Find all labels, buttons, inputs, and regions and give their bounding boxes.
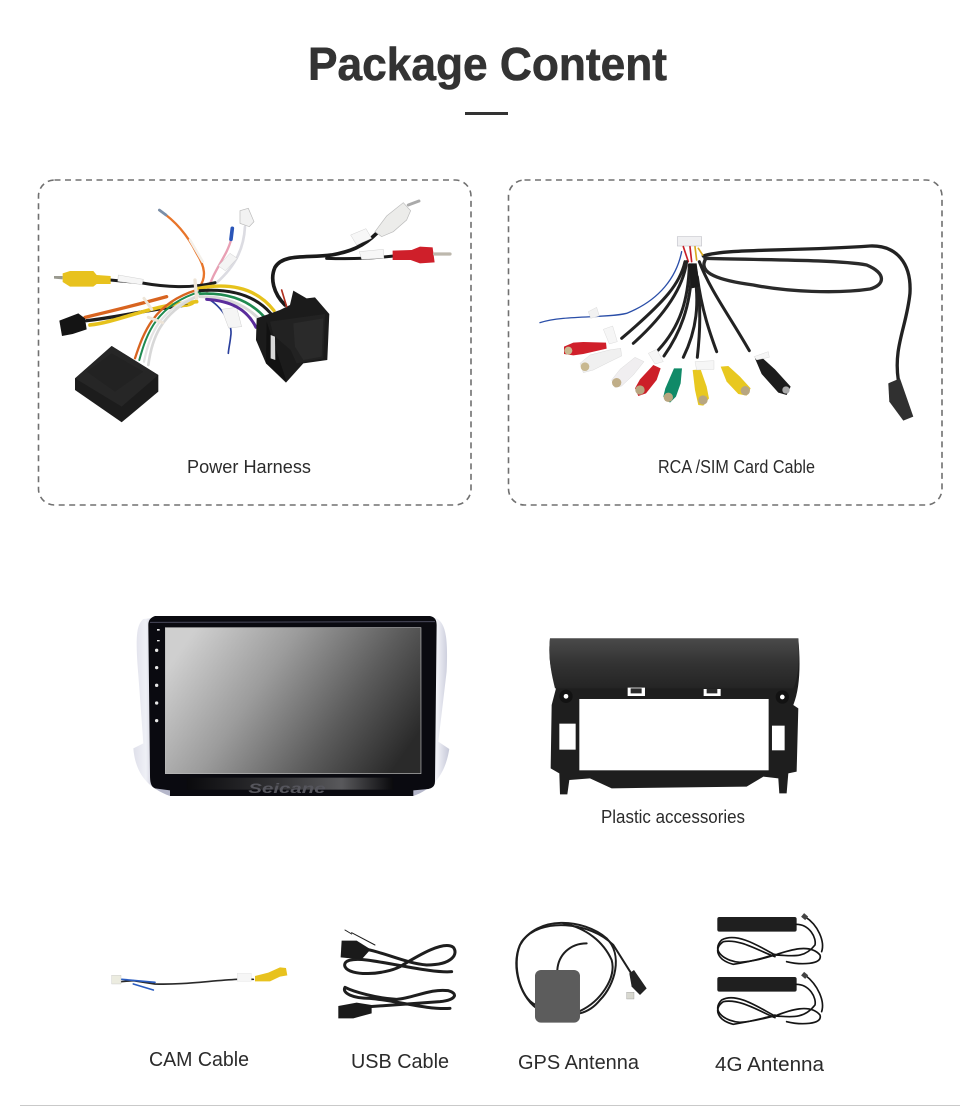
main wire bundle	[197, 286, 274, 311]
USB cable photo	[338, 930, 455, 1018]
label: GPS Antenna	[518, 1052, 640, 1074]
orange wire	[160, 211, 204, 287]
red RCA	[564, 342, 607, 355]
label: Power Harness	[187, 457, 311, 477]
title underline	[465, 112, 508, 115]
black jack	[755, 357, 791, 395]
panel: plastic accessories	[549, 638, 800, 827]
side windows	[559, 724, 576, 750]
label: RCA /SIM Card Cable	[658, 457, 815, 477]
white plug lead	[217, 227, 245, 283]
dashed border	[508, 180, 942, 505]
black bezel	[148, 616, 437, 796]
item: 4G antenna	[715, 913, 825, 1076]
white connector	[677, 237, 702, 246]
title: Package Content	[308, 38, 667, 90]
gradient screen	[165, 628, 421, 774]
plug ends	[564, 347, 572, 355]
head unit display	[133, 616, 449, 796]
side buttons	[155, 629, 160, 722]
4G antenna photo	[717, 913, 822, 1024]
photo: RCA cable	[540, 237, 913, 421]
white RCA two	[612, 357, 644, 388]
red RCA plug	[393, 247, 435, 263]
green RCA	[663, 368, 682, 403]
blue wire	[540, 252, 682, 323]
frame opening	[579, 699, 769, 770]
label: Plastic accessories	[601, 807, 745, 827]
pink and blue lead	[207, 240, 231, 293]
audio cables	[273, 233, 377, 305]
decoder box	[75, 346, 158, 422]
footer rule	[20, 1105, 960, 1106]
large connector	[256, 291, 329, 383]
colored leads	[683, 247, 692, 262]
long cable	[703, 246, 910, 380]
clips	[628, 688, 721, 696]
yellow RCA	[693, 369, 709, 406]
reflection strip	[187, 778, 393, 790]
cable ties	[195, 280, 197, 298]
yellow RCA two	[721, 366, 751, 396]
wires to box	[135, 290, 197, 358]
CAM cable photo	[112, 967, 287, 990]
dashed border	[38, 180, 471, 505]
item: CAM cable	[112, 967, 287, 1071]
white RCA	[580, 348, 622, 373]
upper frame line	[150, 620, 435, 624]
label: 4G Antenna	[715, 1054, 825, 1076]
SIM module	[888, 378, 913, 421]
yellow RCA plug	[110, 280, 215, 287]
white RCA plug	[375, 203, 411, 237]
item: GPS antenna	[516, 923, 647, 1074]
brand: Seicane	[248, 780, 326, 796]
item: USB cable	[338, 930, 455, 1073]
label: CAM Cable	[149, 1049, 249, 1071]
white tags	[603, 326, 769, 370]
label: USB Cable	[351, 1051, 449, 1073]
plastic frame photo	[549, 638, 800, 794]
blue wire with label	[203, 297, 231, 353]
GPS antenna photo	[516, 923, 647, 1023]
panel: power harness	[38, 180, 471, 505]
left wire bundle	[85, 297, 167, 317]
red RCA two	[635, 365, 661, 396]
panel: RCA SIM card cable	[508, 180, 942, 505]
trunk	[688, 263, 699, 288]
screw holes	[559, 690, 573, 703]
silver side trim	[133, 618, 449, 796]
photo: power harness	[54, 201, 450, 422]
black branches	[622, 262, 685, 338]
antenna puck	[535, 970, 580, 1023]
